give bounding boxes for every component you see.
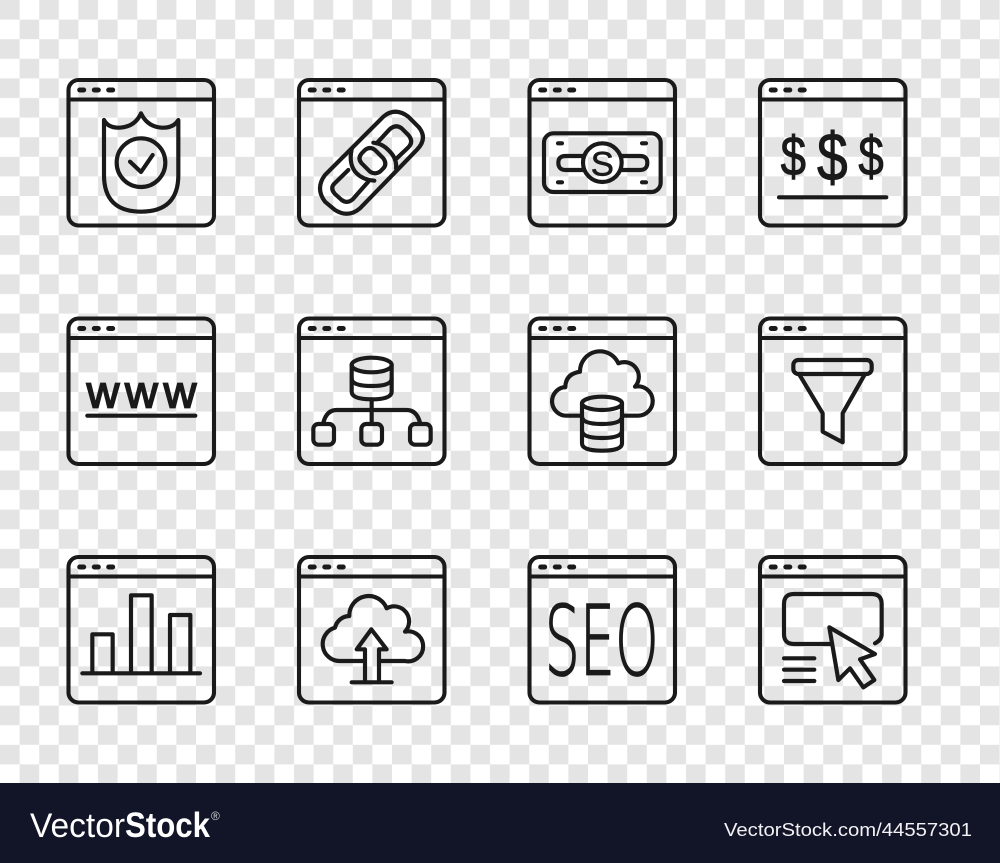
image id: VectorStock.com/44557301 <box>724 819 972 840</box>
icon: browser with database network <box>299 318 444 464</box>
bar chart <box>82 595 200 673</box>
icon: browser with banknote <box>530 80 675 226</box>
icon: browser with button and cursor <box>760 557 906 702</box>
window frame <box>760 318 906 464</box>
icon: browser with shield <box>68 80 214 226</box>
SEO text: SEO <box>545 585 659 697</box>
footer bar <box>0 783 1000 863</box>
button, text lines and pointer <box>784 594 882 687</box>
window frame <box>68 80 214 226</box>
window frame <box>68 557 214 702</box>
icon: browser with funnel <box>760 318 906 464</box>
cloud and database <box>552 351 653 451</box>
cloud with up arrow <box>323 596 423 682</box>
window frame <box>68 318 214 464</box>
icon: browser with cloud database <box>530 318 675 464</box>
window frame <box>299 80 444 226</box>
VectorStock logo: Stock <box>125 806 210 845</box>
icon: browser with SEO text <box>530 557 675 702</box>
window frame <box>299 318 444 464</box>
funnel <box>793 360 872 442</box>
window frame <box>530 80 675 226</box>
icon: browser with cloud upload <box>299 557 444 702</box>
database hierarchy <box>313 358 431 445</box>
dollar signs and underline: $ <box>781 124 806 187</box>
dollar coin letter: S <box>591 146 614 184</box>
icon: browser with three dollar signs <box>760 80 906 226</box>
VectorStock logo: ® <box>211 809 220 823</box>
window frame <box>760 557 906 702</box>
window frame <box>760 80 906 226</box>
window frame <box>530 557 675 702</box>
icon: browser with bar chart <box>68 557 214 702</box>
dollar signs and underline <box>779 119 886 197</box>
icon: browser with www <box>68 318 214 464</box>
banknote <box>544 133 661 192</box>
shield with check mark <box>104 113 178 212</box>
chain link <box>320 112 423 214</box>
window frame <box>530 318 675 464</box>
window frame <box>299 557 444 702</box>
VectorStock logo: Vector <box>30 807 125 845</box>
www text and underline: www <box>86 366 197 417</box>
VectorStock logo <box>30 806 220 845</box>
dollar signs and underline: $ <box>858 124 884 187</box>
icon: browser with chain link <box>299 80 444 226</box>
dollar signs and underline: $ <box>817 119 848 195</box>
